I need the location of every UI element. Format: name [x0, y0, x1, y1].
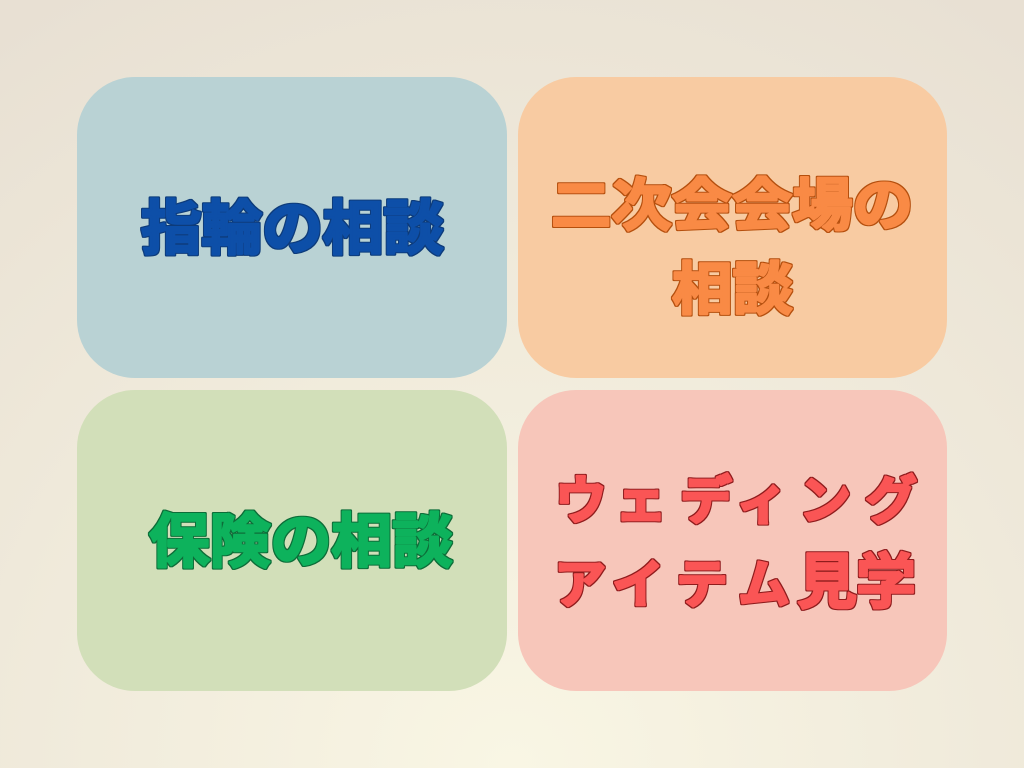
panel: ring consultation [77, 77, 507, 378]
label: insurance consultation: 保険の相談 [149, 509, 453, 575]
label: after-party venue consultation: 相談 [672, 258, 793, 322]
label: after-party venue consultation [551, 174, 913, 322]
panel: after-party venue consultation [518, 77, 947, 378]
label: wedding item viewing: ウェディング [555, 473, 917, 531]
label: wedding item viewing: アイテム [554, 557, 790, 615]
panel: insurance consultation [77, 390, 507, 691]
label: after-party venue consultation: 二次会会場の [551, 174, 913, 238]
panel: wedding item viewing [518, 390, 947, 691]
label: wedding item viewing: 見学 [797, 549, 916, 616]
label: ring consultation: 指輪の相談 [141, 196, 444, 262]
label: wedding item viewing [554, 473, 917, 616]
